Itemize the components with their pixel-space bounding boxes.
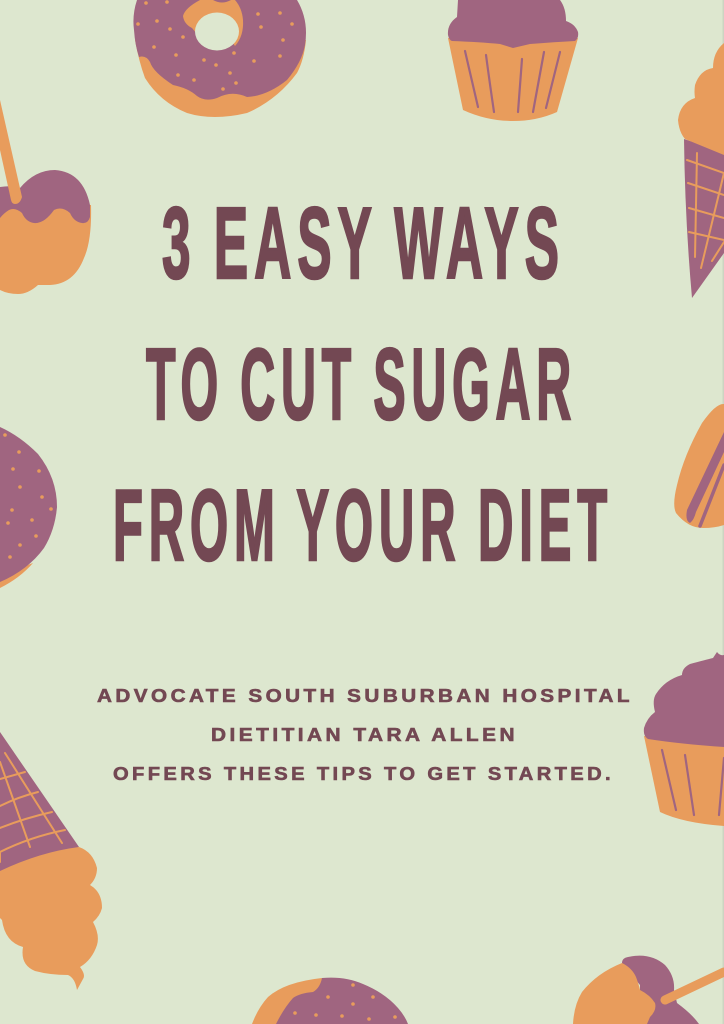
subtitle text block xyxy=(97,686,633,784)
icon: bottom right candy apple xyxy=(573,956,724,1024)
subtitle line 3: OFFERS THESE TIPS TO GET STARTED. xyxy=(113,764,614,784)
title xyxy=(113,188,613,582)
icon: top right ice cream cone xyxy=(678,43,724,298)
icon: left candy apple xyxy=(0,100,91,294)
icon: right macaron xyxy=(674,404,724,528)
icon: top donut xyxy=(133,0,306,117)
subtitle line 2: DIETITIAN TARA ALLEN xyxy=(211,725,518,745)
icon: bottom donut xyxy=(252,978,408,1024)
icon: right cupcake xyxy=(644,652,724,826)
icon: left donut xyxy=(0,427,57,588)
icon: left ice cream cone xyxy=(0,732,102,990)
icon: top cupcake xyxy=(448,0,578,121)
subtitle line 1: ADVOCATE SOUTH SUBURBAN HOSPITAL xyxy=(97,686,633,706)
